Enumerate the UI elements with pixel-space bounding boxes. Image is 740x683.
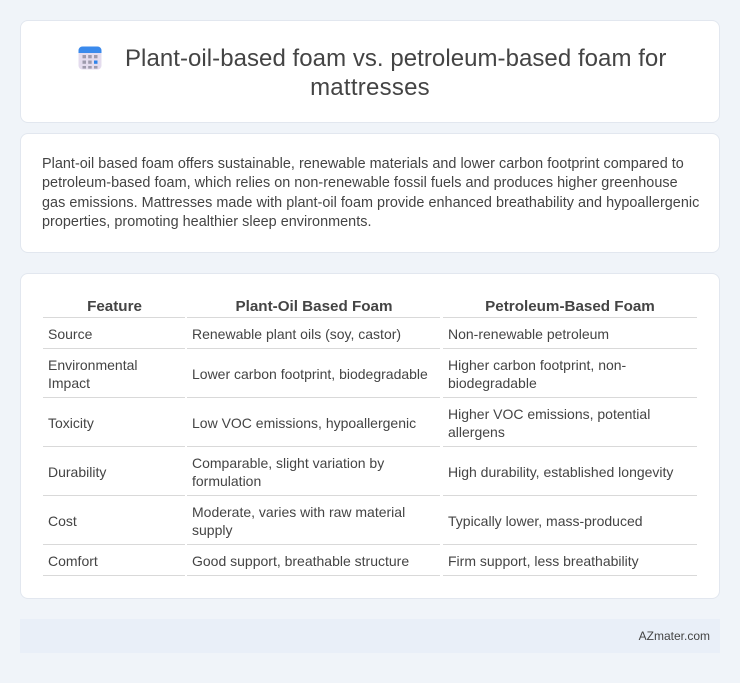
table header: Petroleum-Based Foam	[485, 298, 655, 315]
row: cost: Typically lower, mass-produced	[448, 513, 643, 529]
row: toxicity	[43, 406, 697, 447]
icon: calendar	[78, 46, 102, 70]
row: durability: High durability, established longevity	[448, 464, 673, 480]
row: durability: Durability	[48, 464, 106, 480]
row: durability: Comparable, slight variation by	[192, 455, 384, 471]
summary text: petroleum-based foam, which relies on non-renewable fossil fuels and produces higher greenhouse	[42, 175, 678, 191]
panel: summary	[20, 133, 720, 253]
row: comfort	[43, 553, 697, 576]
row: cost: Cost	[48, 513, 77, 529]
row: comfort: Firm support, less breathability	[448, 553, 639, 569]
row: source	[43, 326, 697, 349]
table header	[43, 298, 697, 318]
row: cost: supply	[192, 522, 232, 538]
table header: Feature	[87, 298, 142, 315]
header panel	[20, 20, 720, 123]
row: environmental impact: Lower carbon footprint, biodegradable	[192, 366, 428, 382]
row: toxicity: Higher VOC emissions, potential	[448, 406, 650, 422]
row: source: Renewable plant oils (soy, castor)	[192, 326, 401, 342]
row: durability	[43, 455, 697, 496]
row: toxicity: Toxicity	[48, 415, 94, 431]
table header: Plant-Oil Based Foam	[236, 298, 392, 315]
row: environmental impact: Impact	[48, 375, 90, 391]
row: comfort: Good support, breathable structure	[192, 553, 409, 569]
row: toxicity: allergens	[448, 424, 505, 440]
summary text	[42, 156, 699, 230]
row: source: Non-renewable petroleum	[448, 326, 609, 342]
title	[125, 45, 666, 101]
title: Plant-oil-based foam vs. petroleum-based foam for	[125, 45, 666, 72]
row: environmental impact: biodegradable	[448, 375, 537, 391]
row: durability: formulation	[192, 473, 261, 489]
row: source: Source	[48, 326, 92, 342]
row: toxicity: Low VOC emissions, hypoallergenic	[192, 415, 416, 431]
footer credit: AZmater.com	[639, 629, 710, 643]
footer bar	[20, 619, 720, 653]
row: cost: Moderate, varies with raw material	[192, 504, 405, 520]
row: environmental impact: Environmental	[48, 357, 138, 373]
row: environmental impact	[43, 357, 697, 398]
row: environmental impact: Higher carbon footprint, non-	[448, 357, 626, 373]
title: mattresses	[310, 74, 430, 101]
summary text: gas emissions. Mattresses made with plant-oil foam provide enhanced breathability and hypoallergenic	[42, 195, 699, 211]
summary text: Plant-oil based foam offers sustainable, renewable materials and lower carbon footprint compared to	[42, 156, 684, 172]
panel: comparison table	[20, 273, 720, 599]
summary text: properties, promoting healthier sleep environments.	[42, 214, 372, 230]
row: comfort: Comfort	[48, 553, 98, 569]
row: cost	[43, 504, 697, 545]
